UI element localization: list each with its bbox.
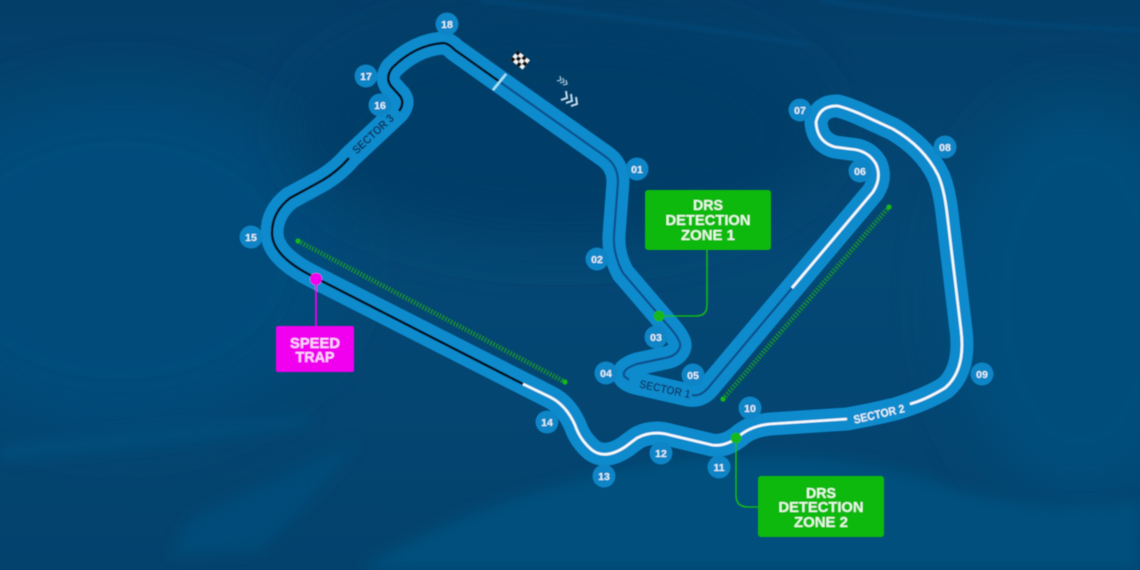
turn number badges: 02 [591,254,603,266]
turn number badges: 11 [713,462,725,474]
callout: DRS detection zone 1 [645,190,771,322]
turn number badges: 10 [744,403,756,415]
turn number badges: 03 [650,332,662,344]
callout: DRS detection zone 2: DETECTION [778,500,864,516]
sector 1 label: SECTOR 1 [638,379,692,401]
track: sector 3 centre line [272,43,523,384]
callout: DRS detection zone 2: DRS [806,486,836,502]
icon: chequered flag [510,50,530,70]
turn number badges: 01 [631,164,643,176]
track: sector 1 centre line [500,82,792,395]
turn number badges: 09 [976,369,988,381]
callout: DRS detection zone 2 [730,432,884,537]
turn number badges: 12 [655,448,667,460]
turn number badges: 14 [541,417,553,429]
turn number badges: 17 [360,71,372,83]
callout: DRS detection zone 1: DRS [693,198,723,214]
callout: speed trap: SPEED [290,336,340,352]
callout: DRS detection zone 2: ZONE 2 [794,515,848,531]
DRS zone 2 dotted line [723,207,889,399]
turn number badges [240,12,994,488]
DRS line end markers [295,204,892,402]
turn number badges: 06 [854,166,866,178]
turn number badges: 04 [600,368,612,380]
icon: direction chevrons [557,76,577,106]
track: circuit outline [272,43,962,454]
turn number badges: 18 [441,19,453,31]
track: sector 2 centre line [523,106,962,454]
turn number badges: 16 [374,100,386,112]
DRS zone 1 dotted line [298,241,565,382]
callout: speed trap: TRAP [296,350,335,366]
callout: DRS detection zone 1: ZONE 1 [681,228,735,244]
sector 3 label: SECTOR 3 [351,113,397,157]
start/finish line [493,74,506,90]
turn number badges: 13 [598,471,610,483]
callout: DRS detection zone 1: DETECTION [666,213,750,229]
turn number badges: 05 [687,370,699,382]
turn number badges: 08 [939,142,951,154]
turn number badges: 15 [245,232,257,244]
sector 2 label: SECTOR 2 [853,403,906,427]
turn number badges: 07 [794,105,806,117]
callout: speed trap [276,273,354,372]
